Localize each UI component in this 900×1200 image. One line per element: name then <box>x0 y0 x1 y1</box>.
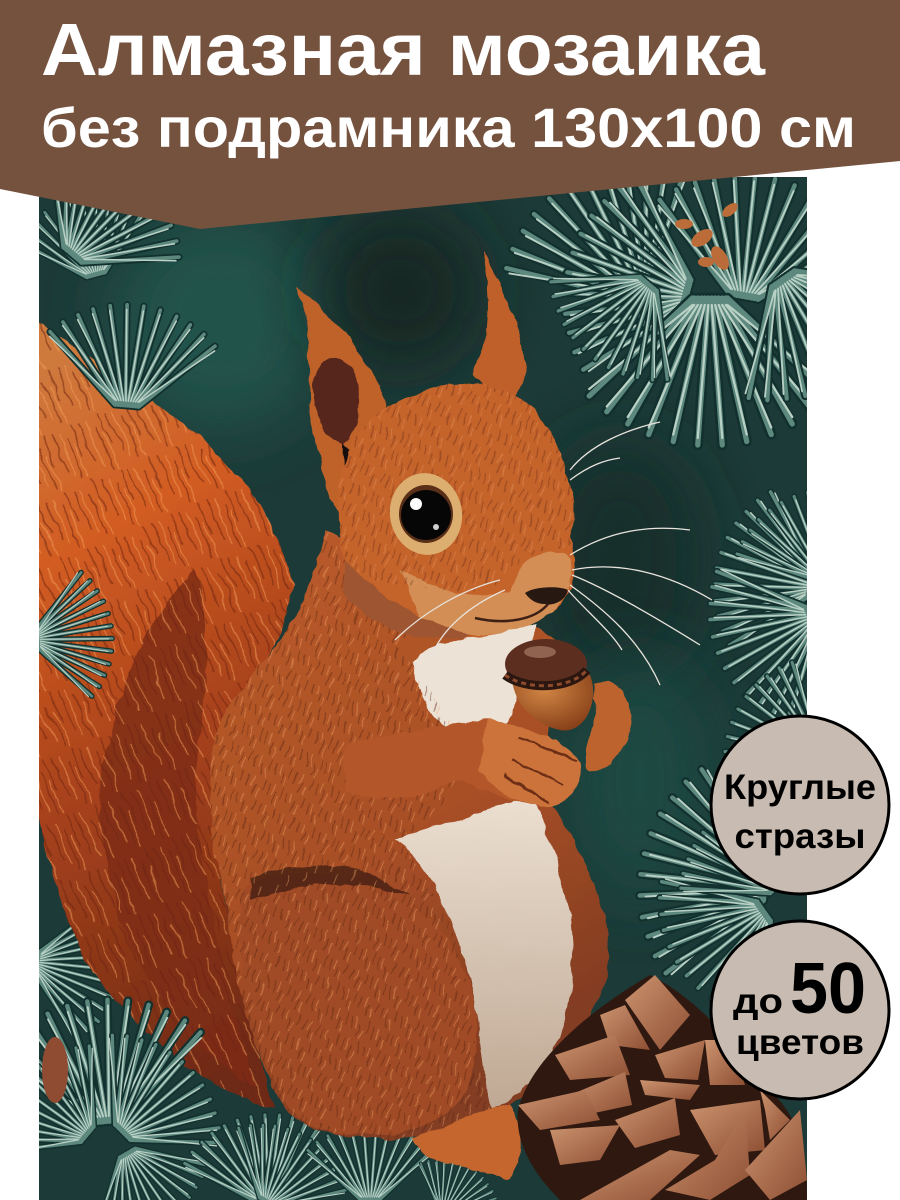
left ear <box>295 285 387 530</box>
pine branches: top right <box>504 177 807 450</box>
far paw and hind foot <box>410 682 632 1178</box>
badge: up to 50 colours: цветов <box>736 1023 864 1062</box>
badge: up to 50 colours: 50 <box>790 949 866 1029</box>
badge: up to 50 colours: до <box>733 982 783 1021</box>
fur texture on body <box>209 530 490 1139</box>
banner shape <box>0 0 900 229</box>
nose <box>525 587 568 604</box>
chest <box>410 625 535 730</box>
pine branch overlapping tail tip <box>44 298 218 413</box>
squirrel face details <box>383 422 712 685</box>
pine branches: bottom left <box>39 995 498 1200</box>
mouth <box>475 604 548 621</box>
badge: round rhinestones <box>711 716 889 894</box>
title: Алмазная мозаика <box>41 8 766 91</box>
cheek <box>340 560 470 638</box>
small pine cone buds <box>675 203 738 270</box>
belly <box>395 790 574 1110</box>
pine branch overlapping left tail edge <box>39 570 115 699</box>
body <box>209 530 610 1139</box>
small red buds <box>42 1037 68 1103</box>
pine branches: left side <box>39 926 114 1036</box>
eye <box>390 473 462 555</box>
artwork: squirrel painting <box>39 177 807 1200</box>
whiskers <box>395 422 712 685</box>
right ear <box>472 250 526 401</box>
squirrel <box>209 250 610 1139</box>
arm <box>345 720 580 806</box>
pine branches: right side <box>636 488 807 1002</box>
badge: round rhinestones: стразы <box>734 817 866 856</box>
fur texture on head <box>338 384 574 590</box>
painting background <box>39 177 807 1200</box>
banner <box>0 0 900 229</box>
tail <box>32 325 295 1108</box>
pine branches: top left <box>39 200 182 280</box>
badge: round rhinestones: Круглые <box>724 768 876 807</box>
pine cone <box>518 975 807 1200</box>
background light and shadow patches <box>110 210 710 900</box>
subtitle: без подрамника 130х100 см <box>41 96 856 159</box>
badge: up to 50 colours <box>711 921 889 1099</box>
head <box>338 384 574 635</box>
acorn <box>505 639 593 730</box>
haunch <box>239 873 477 1136</box>
